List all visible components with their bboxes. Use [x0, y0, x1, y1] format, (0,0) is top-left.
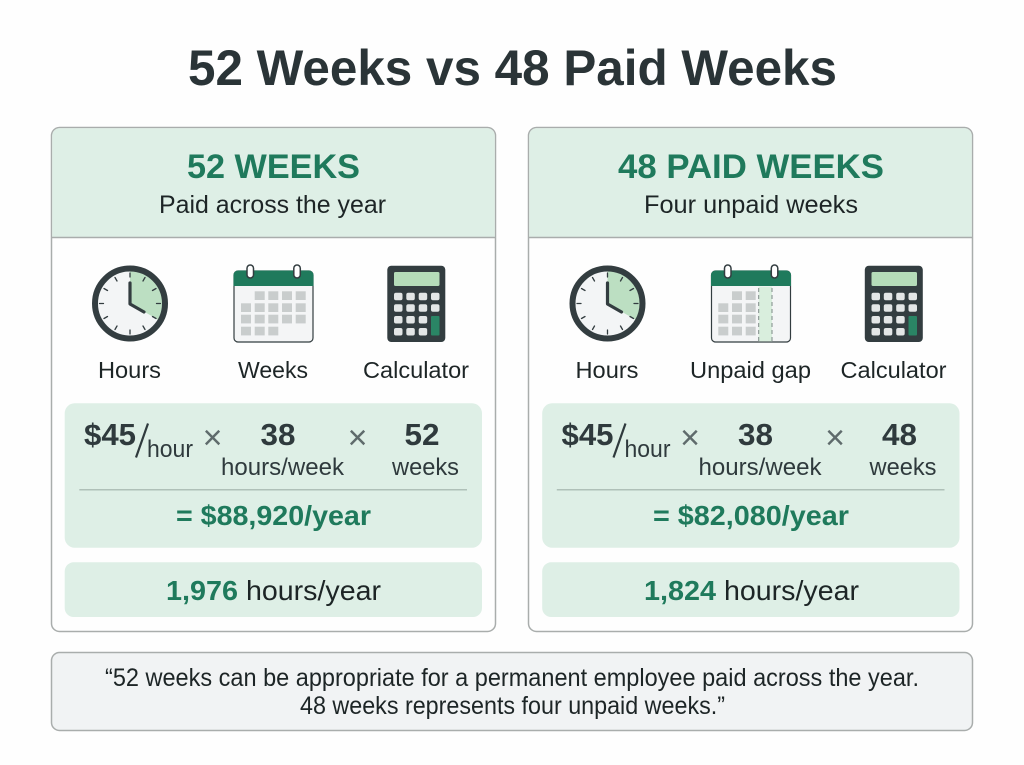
multiply sign: × [825, 419, 845, 457]
icon: calculator [865, 266, 923, 342]
icon: calculator [387, 266, 445, 342]
weeks per year [391, 417, 459, 481]
label: calculator: Calculator [840, 357, 947, 383]
multiply sign: × [203, 419, 222, 457]
heading: 48 paid weeks: 48 PAID WEEKS [618, 148, 884, 186]
icon: calendar [234, 265, 314, 342]
callout: quote: 48 weeks represents four unpaid weeks.” [300, 692, 725, 720]
weeks per year: weeks [869, 454, 936, 481]
label: unpaid gap: Unpaid gap [690, 357, 811, 383]
hours per week [698, 417, 822, 481]
label: hours: Hours [576, 357, 638, 383]
hours per year box: hours/year [246, 575, 381, 606]
multiply sign: × [680, 419, 700, 457]
hours per week: hours/week [221, 454, 345, 481]
heading: 52 weeks: 52 WEEKS [187, 148, 360, 186]
title: 52 Weeks vs 48 Paid Weeks [188, 40, 837, 96]
hours per week: hours/week [698, 454, 822, 481]
icon: calendar with unpaid gap [711, 265, 791, 342]
weeks per year [869, 417, 936, 481]
panel: 52 weeks [52, 128, 496, 632]
label: hours: Hours [98, 357, 161, 383]
formula box [65, 403, 482, 548]
multiply sign: × [348, 419, 367, 457]
rate: $45 per hour: $45 [562, 417, 614, 452]
weeks per year: 48 [882, 417, 917, 452]
rate: $45 per hour [84, 417, 193, 463]
label: calculator: Calculator [363, 357, 469, 383]
rate: $45 per hour: hour [624, 436, 670, 463]
rate: $45 per hour: hour [147, 436, 193, 463]
callout: quote: “52 weeks can be appropriate for a permanent employee paid across the year. [105, 664, 919, 692]
callout: quote [52, 652, 972, 730]
weeks per year: 52 [404, 417, 440, 452]
hours per year box: 1,824 [644, 575, 716, 606]
hours per week [221, 417, 345, 481]
hours per year box [542, 562, 960, 617]
hours per week: 38 [738, 417, 773, 452]
weeks per year: weeks [391, 454, 459, 481]
panel: 48 paid weeks [528, 128, 972, 632]
icon: clock [95, 268, 165, 338]
hours per year box: 1,976 [166, 575, 238, 606]
result: annual pay: = $82,080/year [653, 500, 849, 531]
hours per week: 38 [260, 417, 296, 452]
formula box [542, 403, 960, 548]
result: annual pay: = $88,920/year [176, 500, 371, 531]
subheading: four unpaid weeks: Four unpaid weeks [644, 191, 858, 219]
rate: $45 per hour: $45 [84, 417, 136, 452]
panel header: 52 weeks [52, 128, 495, 238]
hours per year box [65, 562, 482, 617]
hours per year box: hours/year [724, 575, 859, 606]
panel header: 48 paid weeks [529, 128, 972, 238]
label: weeks: Weeks [238, 357, 308, 383]
subheading: paid across the year: Paid across the year [159, 191, 386, 219]
icon: clock [572, 268, 642, 338]
rate: $45 per hour [562, 417, 670, 463]
